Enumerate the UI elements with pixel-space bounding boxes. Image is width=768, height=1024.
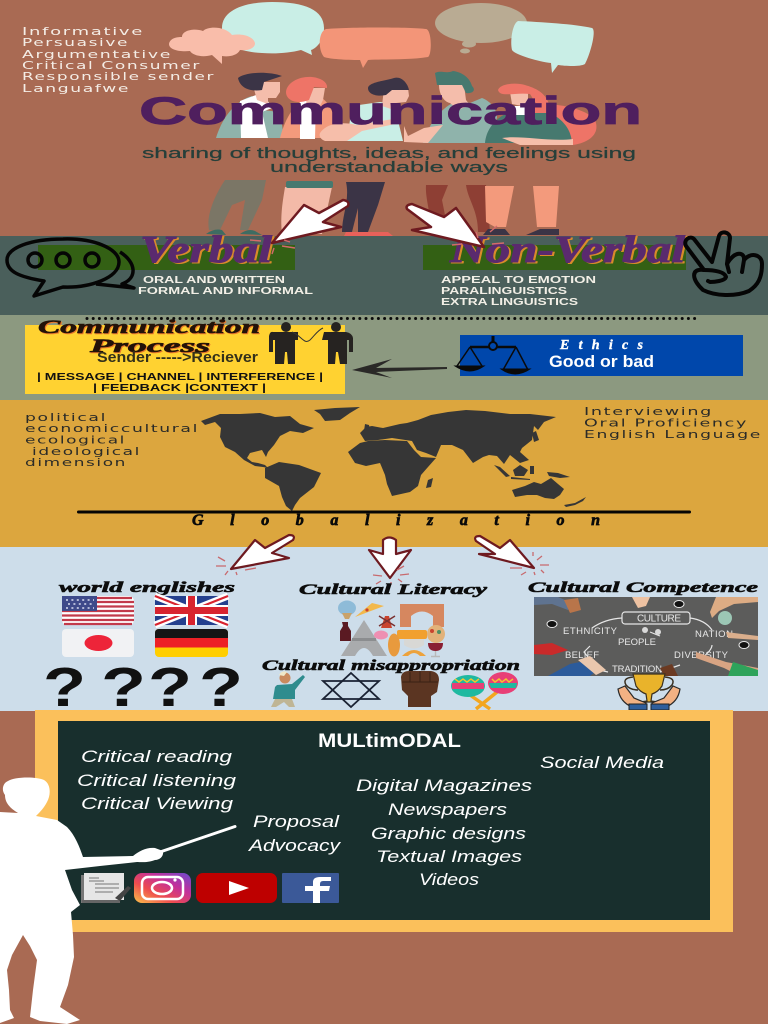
photo: culture diagram: DIVERSITY	[674, 650, 729, 661]
icon: youtube	[196, 873, 277, 903]
flag: japan	[62, 629, 134, 657]
heading: communication process: Communication	[38, 317, 260, 338]
heading: communication process: Process	[88, 336, 210, 357]
heading: multimodal: MULtimODAL	[318, 731, 461, 752]
photo: culture diagram: NATION	[695, 629, 733, 640]
purpose list: Critical Consumer	[22, 60, 201, 72]
verbal details: FORMAL AND INFORMAL	[138, 285, 314, 297]
icon: raised fist	[401, 671, 439, 707]
icons: landmarks and food	[338, 600, 445, 656]
icon: star of david	[323, 673, 379, 707]
heading: globalization: Globalization	[192, 512, 600, 529]
purpose list	[22, 26, 215, 95]
subtitle: sharing of thoughts, ideas, and feelings using	[142, 145, 636, 162]
arrow: to world englishes	[216, 535, 294, 575]
globalization dimensions: political	[25, 412, 107, 424]
purpose list: Languafwe	[22, 83, 130, 95]
proposal and advocacy: Proposal	[253, 813, 341, 831]
question marks: ?	[148, 656, 192, 718]
photo: culture diagram: PEOPLE	[618, 637, 656, 648]
purpose list: Informative	[22, 26, 144, 38]
critical skills	[77, 748, 237, 813]
critical skills: Critical listening	[77, 772, 237, 790]
good or bad: Good or bad	[549, 352, 654, 371]
non-verbal details	[441, 274, 596, 308]
media types: Graphic designs	[371, 825, 526, 843]
teacher silhouette	[0, 777, 163, 1024]
heading: verbal: Verbal	[140, 229, 273, 271]
globalization dimensions: ecological	[25, 434, 126, 446]
subtitle: understandable ways	[270, 159, 508, 176]
arrow: ethics to process	[352, 359, 447, 378]
heading: communication process	[38, 317, 260, 357]
panel: chalkboard frame	[35, 710, 733, 932]
media types: Textual Images	[376, 848, 522, 866]
purpose list: Argumentative	[22, 49, 172, 61]
panel: communication process	[25, 317, 353, 394]
verbal details	[138, 274, 314, 297]
non-verbal details: PARALINGUISTICS	[441, 285, 567, 297]
photo: culture diagram: ETHNICITY	[563, 626, 618, 637]
people legs	[206, 180, 559, 236]
icon: peace hand	[685, 232, 762, 295]
panel: ethics	[455, 335, 743, 376]
photo: culture diagram	[534, 597, 758, 676]
arrow: to cultural competence	[475, 536, 549, 575]
arrow: to non-verbal	[407, 204, 504, 247]
ethics heading: Ethics	[559, 338, 644, 353]
process elements: | FEEDBACK |CONTEXT |	[93, 382, 266, 394]
icon: two people on phone	[269, 322, 353, 364]
icon: maracas	[451, 672, 518, 709]
dotted divider	[87, 317, 695, 320]
sender to receiver: Sender ----->Reciever	[97, 349, 258, 366]
globalization dimensions: economiccultural	[25, 423, 199, 435]
arrows to cultural topics	[216, 535, 549, 585]
photo: culture diagram: BELIEF	[565, 650, 599, 661]
non-verbal details: EXTRA LINGUISTICS	[441, 296, 578, 308]
icon: speech bubbles	[7, 239, 134, 296]
globalization dimensions: dimension	[25, 457, 127, 469]
media types: Videos	[419, 871, 479, 889]
globalization skills: Oral Proficiency	[584, 418, 748, 430]
globalization skills: English Language	[584, 429, 762, 441]
process elements	[37, 371, 323, 394]
media types: Newspapers	[388, 801, 507, 819]
flag: usa	[62, 596, 134, 625]
panel: cultural competence	[528, 580, 759, 710]
icon: trophy in hands	[618, 674, 680, 710]
question marks: ?	[101, 656, 146, 718]
title: Communication	[139, 90, 642, 133]
heading: non-verbal: Non-Verbal	[449, 229, 686, 271]
people upper bodies	[216, 71, 596, 145]
world map	[201, 407, 586, 511]
arrow: to verbal	[250, 200, 348, 254]
icon: instagram	[134, 873, 191, 903]
flag: uk	[155, 596, 228, 625]
icon: child pointing	[271, 671, 305, 707]
process elements: | MESSAGE | CHANNEL | INTERFERENCE |	[37, 371, 323, 383]
panel: globalization	[25, 406, 762, 529]
pointer	[160, 826, 235, 852]
proposal and advocacy: Advocacy	[248, 837, 342, 855]
photo: culture diagram: CULTURE	[637, 614, 681, 624]
question marks	[43, 656, 243, 718]
photo: culture diagram: TRADITION	[612, 664, 662, 675]
heading: cultural misappropriation: Cultural misappropriation	[262, 658, 520, 674]
critical skills: Critical reading	[81, 748, 233, 766]
question marks: ?	[199, 656, 243, 718]
divider line	[77, 510, 691, 514]
label backgrounds	[38, 245, 686, 270]
panel: cultural competence: Cultural Competence	[528, 580, 759, 596]
panel: verbal and non-verbal	[7, 200, 762, 308]
icon: facebook	[282, 873, 339, 903]
globalization skills: Interviewing	[584, 406, 713, 418]
arrow: to cultural literacy	[369, 538, 411, 585]
flag: germany	[155, 629, 228, 657]
question marks: ?	[43, 656, 86, 718]
icon: document	[81, 873, 131, 903]
purpose list: Responsible sender	[22, 71, 215, 83]
globalization dimensions	[25, 412, 199, 469]
non-verbal details: APPEAL TO EMOTION	[441, 274, 596, 286]
icon: scales	[455, 336, 530, 374]
verbal details: ORAL AND WRITTEN	[143, 274, 285, 286]
purpose list: Persuasive	[22, 37, 129, 49]
media types	[356, 777, 532, 889]
panel: world englishes: world englishes	[59, 580, 235, 596]
globalization dimensions: ideological	[32, 446, 141, 458]
speech bubbles	[169, 2, 594, 73]
panel: world englishes	[43, 580, 243, 718]
social media: Social Media	[540, 754, 664, 772]
panel: cultural literacy	[262, 582, 520, 709]
media types: Digital Magazines	[356, 777, 532, 795]
panel: cultural literacy: Cultural Literacy	[299, 582, 488, 598]
critical skills: Critical Viewing	[81, 795, 234, 813]
subtitle	[142, 145, 636, 176]
globalization skills	[584, 406, 762, 441]
proposal and advocacy	[248, 813, 342, 855]
